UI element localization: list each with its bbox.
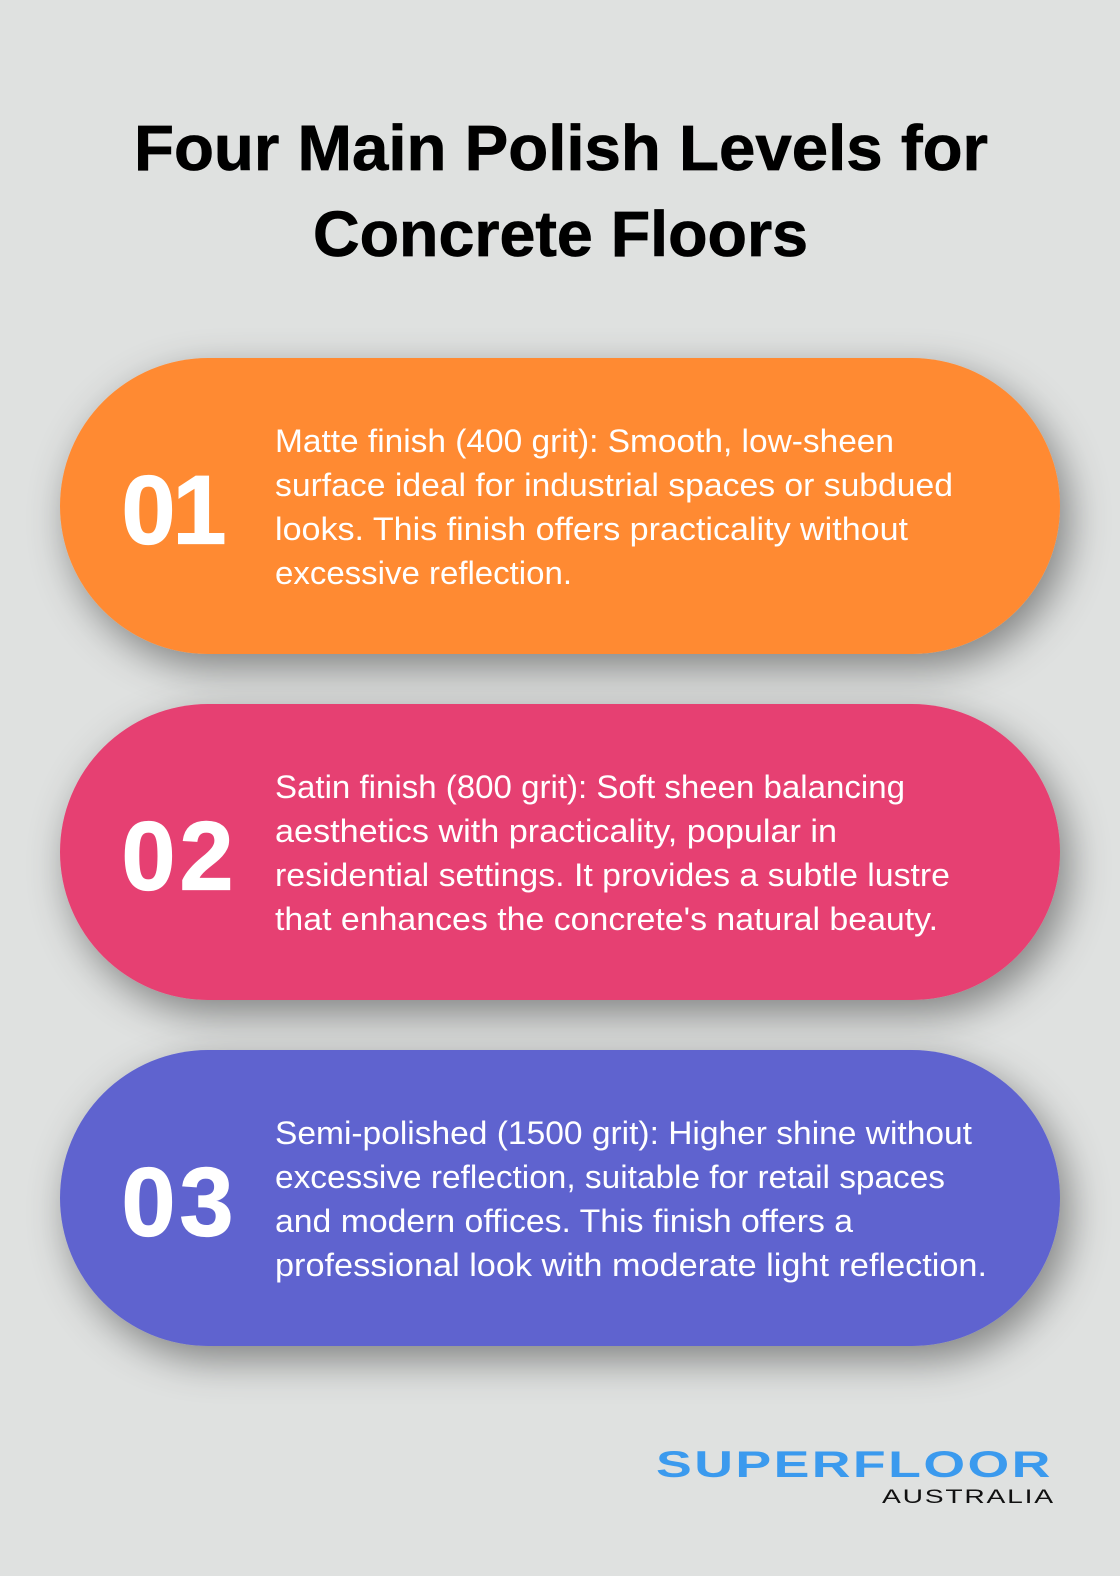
description: semi-polished: Semi-polished (1500 grit): Higher shine without	[275, 1115, 972, 1151]
logo: Superfloor Australia: SUPERFLOOR	[656, 1443, 1050, 1485]
number 03: 03	[122, 1148, 234, 1256]
description: semi-polished: and modern offices. This finish offers a	[275, 1203, 854, 1239]
logo: Superfloor Australia: AUSTRALIA	[882, 1486, 1054, 1508]
description: matte finish: excessive reflection.	[275, 555, 572, 591]
title: Four Main Polish Levels for	[134, 112, 988, 184]
description: matte finish: surface ideal for industrial spaces or subdued	[275, 467, 953, 503]
title	[134, 112, 988, 270]
logo: Superfloor Australia	[656, 1443, 1054, 1508]
purple pill background	[60, 1050, 1060, 1346]
description: matte finish: Matte finish (400 grit): Smooth, low-sheen	[275, 423, 894, 459]
description: satin finish: aesthetics with practicality, popular in	[275, 813, 837, 849]
description: semi-polished: excessive reflection, suitable for retail spaces	[275, 1159, 945, 1195]
description: matte finish: looks. This finish offers practicality without	[275, 511, 908, 547]
description: semi-polished: professional look with moderate light reflection.	[275, 1247, 987, 1283]
description: matte finish	[275, 423, 953, 591]
orange pill background	[60, 358, 1060, 654]
description: satin finish: Satin finish (800 grit): Soft sheen balancing	[275, 769, 905, 805]
panel: satin finish	[60, 704, 1060, 1000]
title: Concrete Floors	[313, 198, 808, 270]
panel: semi-polished	[60, 1050, 1060, 1346]
pink pill background	[60, 704, 1060, 1000]
description: satin finish: residential settings. It provides a subtle lustre	[275, 857, 950, 893]
panel: matte finish	[60, 358, 1060, 654]
number 02: 02	[122, 802, 234, 910]
number 01: 01	[122, 456, 226, 564]
description: satin finish: that enhances the concrete's natural beauty.	[275, 901, 938, 937]
description: satin finish	[275, 769, 950, 937]
description: semi-polished	[275, 1115, 987, 1283]
